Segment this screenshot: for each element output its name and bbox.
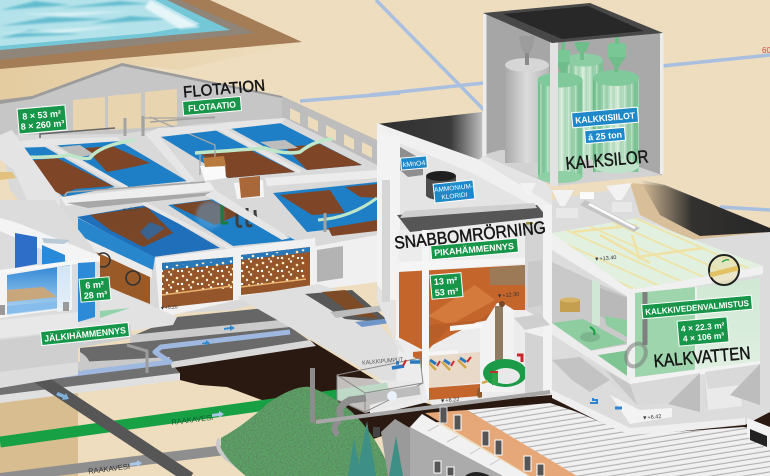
marker circle with detail (709, 255, 739, 285)
label: raakavesi grey pipe: RAAKAVESI (88, 462, 130, 476)
trees (348, 421, 403, 476)
silo: green front left (538, 72, 583, 183)
pipe: raw water green (0, 388, 388, 442)
arrow: green pipe flow (212, 411, 224, 418)
left building: lower slab (78, 283, 177, 338)
kalkvatten building: body (545, 183, 770, 437)
basin: right cut-off pair (265, 170, 377, 236)
label: 4 x 22.3: 4 × 22.3 m² (680, 320, 725, 334)
heading: kalkvatten: KALKVATTEN (653, 343, 751, 371)
arrow: grey pipe flow (130, 460, 142, 467)
town building: orange wall with windows (410, 407, 577, 476)
elevation marker flotation bottom: ▼+5.20 (160, 304, 178, 312)
label: ammoniumkloridi (433, 180, 475, 203)
town building: striped roof (467, 403, 770, 476)
flotation annex grey gap (317, 246, 343, 282)
label: kMnO4 (401, 156, 427, 170)
darker sand left of flotation (0, 42, 302, 102)
basin: back right pair (145, 117, 362, 178)
front left side cut with brown sludge and mixers (66, 218, 155, 304)
heading: flotaatio (183, 96, 241, 116)
flotation top walkway beams (0, 118, 290, 250)
label: kMnO4: kMnO4 (403, 160, 426, 169)
label: kalkkipumput: KALKKIPUMPUT (362, 357, 404, 367)
elevation marker hopper: ▼+6.42 (642, 414, 662, 422)
elevation marker flotation top: ▼+9.90 (122, 206, 140, 214)
heading: jälkihämmennys: JÄLKIHÄMMENNYS (44, 325, 126, 344)
label: kalkkisiilot: KALKKISIILOT (575, 110, 636, 126)
hill: green planted mound (218, 387, 392, 476)
label: 13 m2: 53 m³ (434, 286, 459, 298)
silo support cones and conveyors (520, 183, 640, 232)
pump station box (310, 358, 550, 435)
label: 8 x 53: 8 × 53 m² (22, 108, 61, 122)
town building: grey gable (373, 419, 410, 476)
lower roads under flotation (0, 308, 316, 403)
silo: green front right (593, 37, 639, 173)
front section: flotation cells with bubbles (155, 238, 318, 318)
middle building: white body (377, 112, 552, 405)
flotation back wall with gable (0, 63, 377, 175)
town building: right end (747, 418, 770, 450)
darker sand block bottom left (0, 391, 78, 476)
label: 6 m2: 6 m² (85, 279, 104, 291)
silo: grey (505, 36, 549, 163)
label: 8 x 53 (17, 105, 67, 134)
basin: back left pair (13, 140, 187, 197)
dark excavated ground (170, 340, 770, 442)
label: 4 x 22.3: 4 × 106 m³ (682, 330, 725, 344)
left building: jälkihämmennys (0, 200, 100, 388)
heading: flotaatio: FLOTAATIO (188, 99, 236, 114)
mixing unit: white box with brown agitators (200, 156, 264, 199)
left building: front grey wall (0, 324, 132, 372)
heading: flotation: FLOTATION (183, 77, 266, 102)
heading: pikahämmennys: PIKAHÄMMENNYS (434, 241, 514, 258)
snabbomrörning unit (370, 203, 552, 416)
label: 6 m2 (79, 277, 111, 302)
label: 13 m2 (430, 273, 463, 299)
label: a 25 ton: á 25 ton (588, 130, 622, 142)
heading: snabbomrörning: SNABBOMRÖRNING (393, 217, 547, 253)
chemical tank: ammonium chloride (426, 171, 456, 200)
silo: green back (565, 42, 603, 160)
pipes and valves on the flotation deck (40, 116, 325, 232)
label: 4 x 22.3 (677, 317, 729, 346)
flotation deck (0, 118, 377, 315)
basin: front right (168, 199, 295, 246)
pipe: dark diagonal main (0, 350, 190, 476)
sludge channel on slab (305, 290, 392, 327)
pool: basin border and water (0, 0, 302, 69)
elevation marker upper: ▼+12.30 (497, 292, 520, 300)
label: ammoniumkloridi: AMMONIUM- (434, 183, 473, 194)
label: ammoniumkloridi: KLORIDI (441, 192, 468, 201)
label: 13 m2: 13 m² (433, 275, 458, 287)
label: raakavesi green pipe: RAAKAVESI (171, 413, 214, 427)
elevation marker top kalkvatten: ▼+13.40 (594, 255, 617, 263)
silo building (483, 3, 664, 186)
roads and pipes in the background (300, 0, 770, 210)
label: 6 m2: 28 m³ (83, 289, 108, 301)
pipe: raw water grey (0, 450, 225, 476)
left building: green pipe on slab (100, 308, 130, 318)
heading: kalksilor: KALKSILOR (565, 146, 649, 174)
silo: green small hopper (556, 42, 570, 82)
label: a 25 ton (585, 127, 626, 144)
lower slab leading to pumps (237, 284, 440, 395)
dark roof of kalkvatten (640, 180, 770, 236)
flotation right annex wall (312, 235, 377, 290)
heading: kalkkivedenvalmistus: KALKKIVEDENVALMISTUS (645, 298, 750, 317)
elevation marker lower: ▼+6.22 (440, 397, 460, 405)
basin: front left (77, 203, 232, 257)
label: 8 x 53: 8 × 260 m³ (20, 118, 65, 132)
